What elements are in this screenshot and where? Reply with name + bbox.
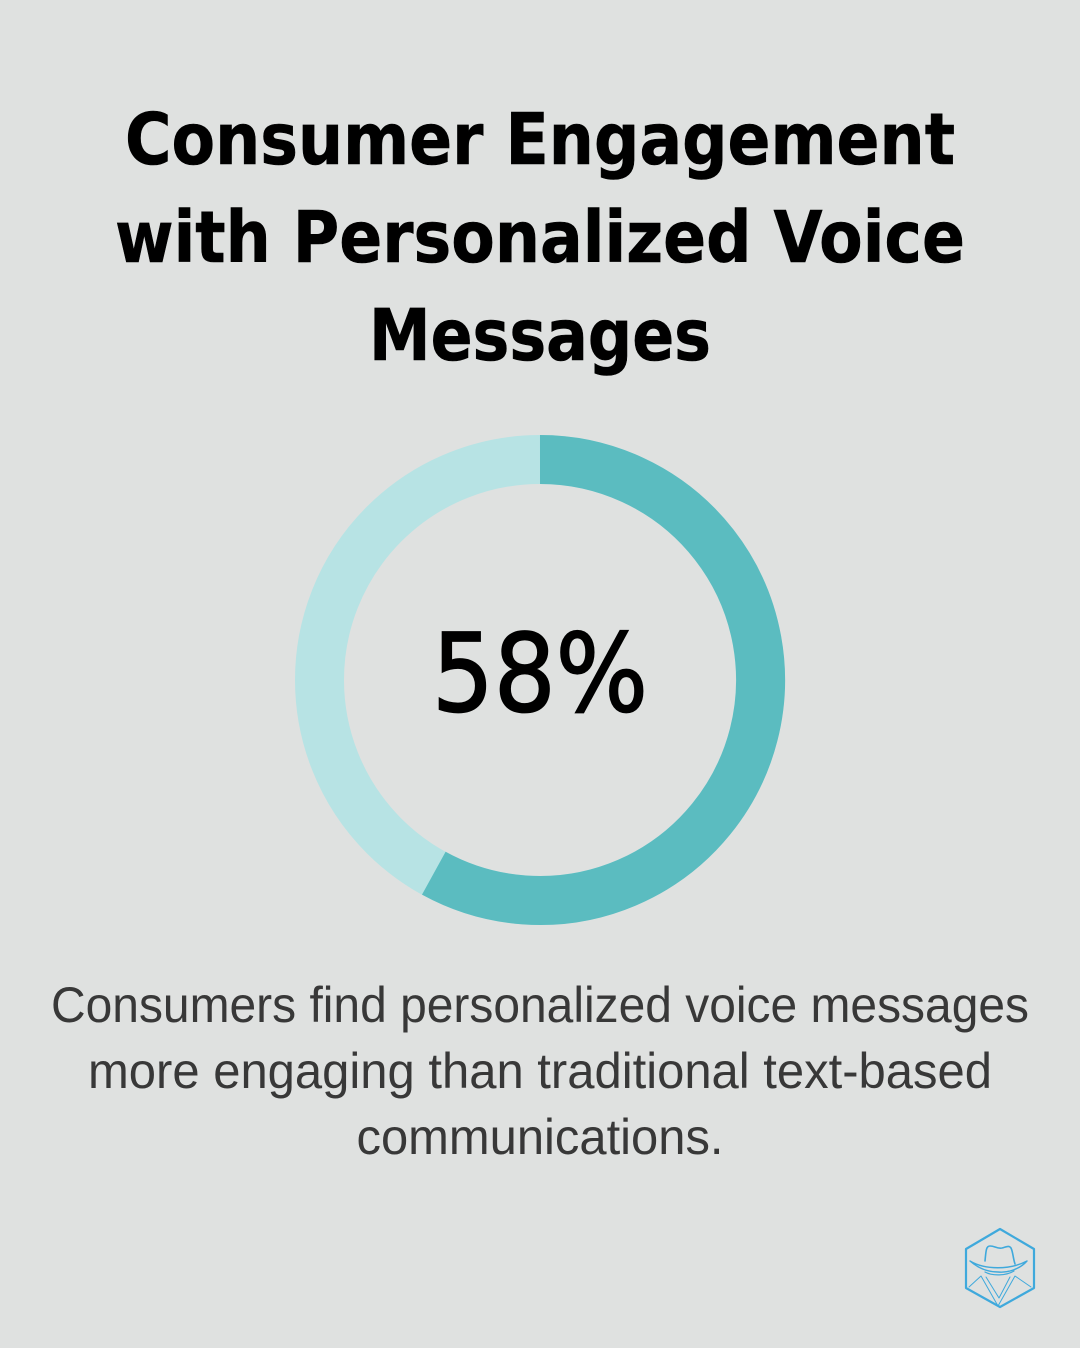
donut value: 58% xyxy=(432,612,648,737)
title: with Personalized Voice xyxy=(115,196,965,279)
description: Consumers find personalized voice messages xyxy=(51,977,1029,1033)
donut chart: 58% xyxy=(320,459,761,900)
description xyxy=(51,977,1029,1165)
description: communications. xyxy=(356,1109,724,1165)
title: Consumer Engagement xyxy=(125,98,955,181)
description: more engaging than traditional text-based xyxy=(88,1043,992,1099)
title xyxy=(115,98,965,377)
title: Messages xyxy=(369,294,711,377)
icon: logo hexagon with hat xyxy=(966,1229,1034,1307)
